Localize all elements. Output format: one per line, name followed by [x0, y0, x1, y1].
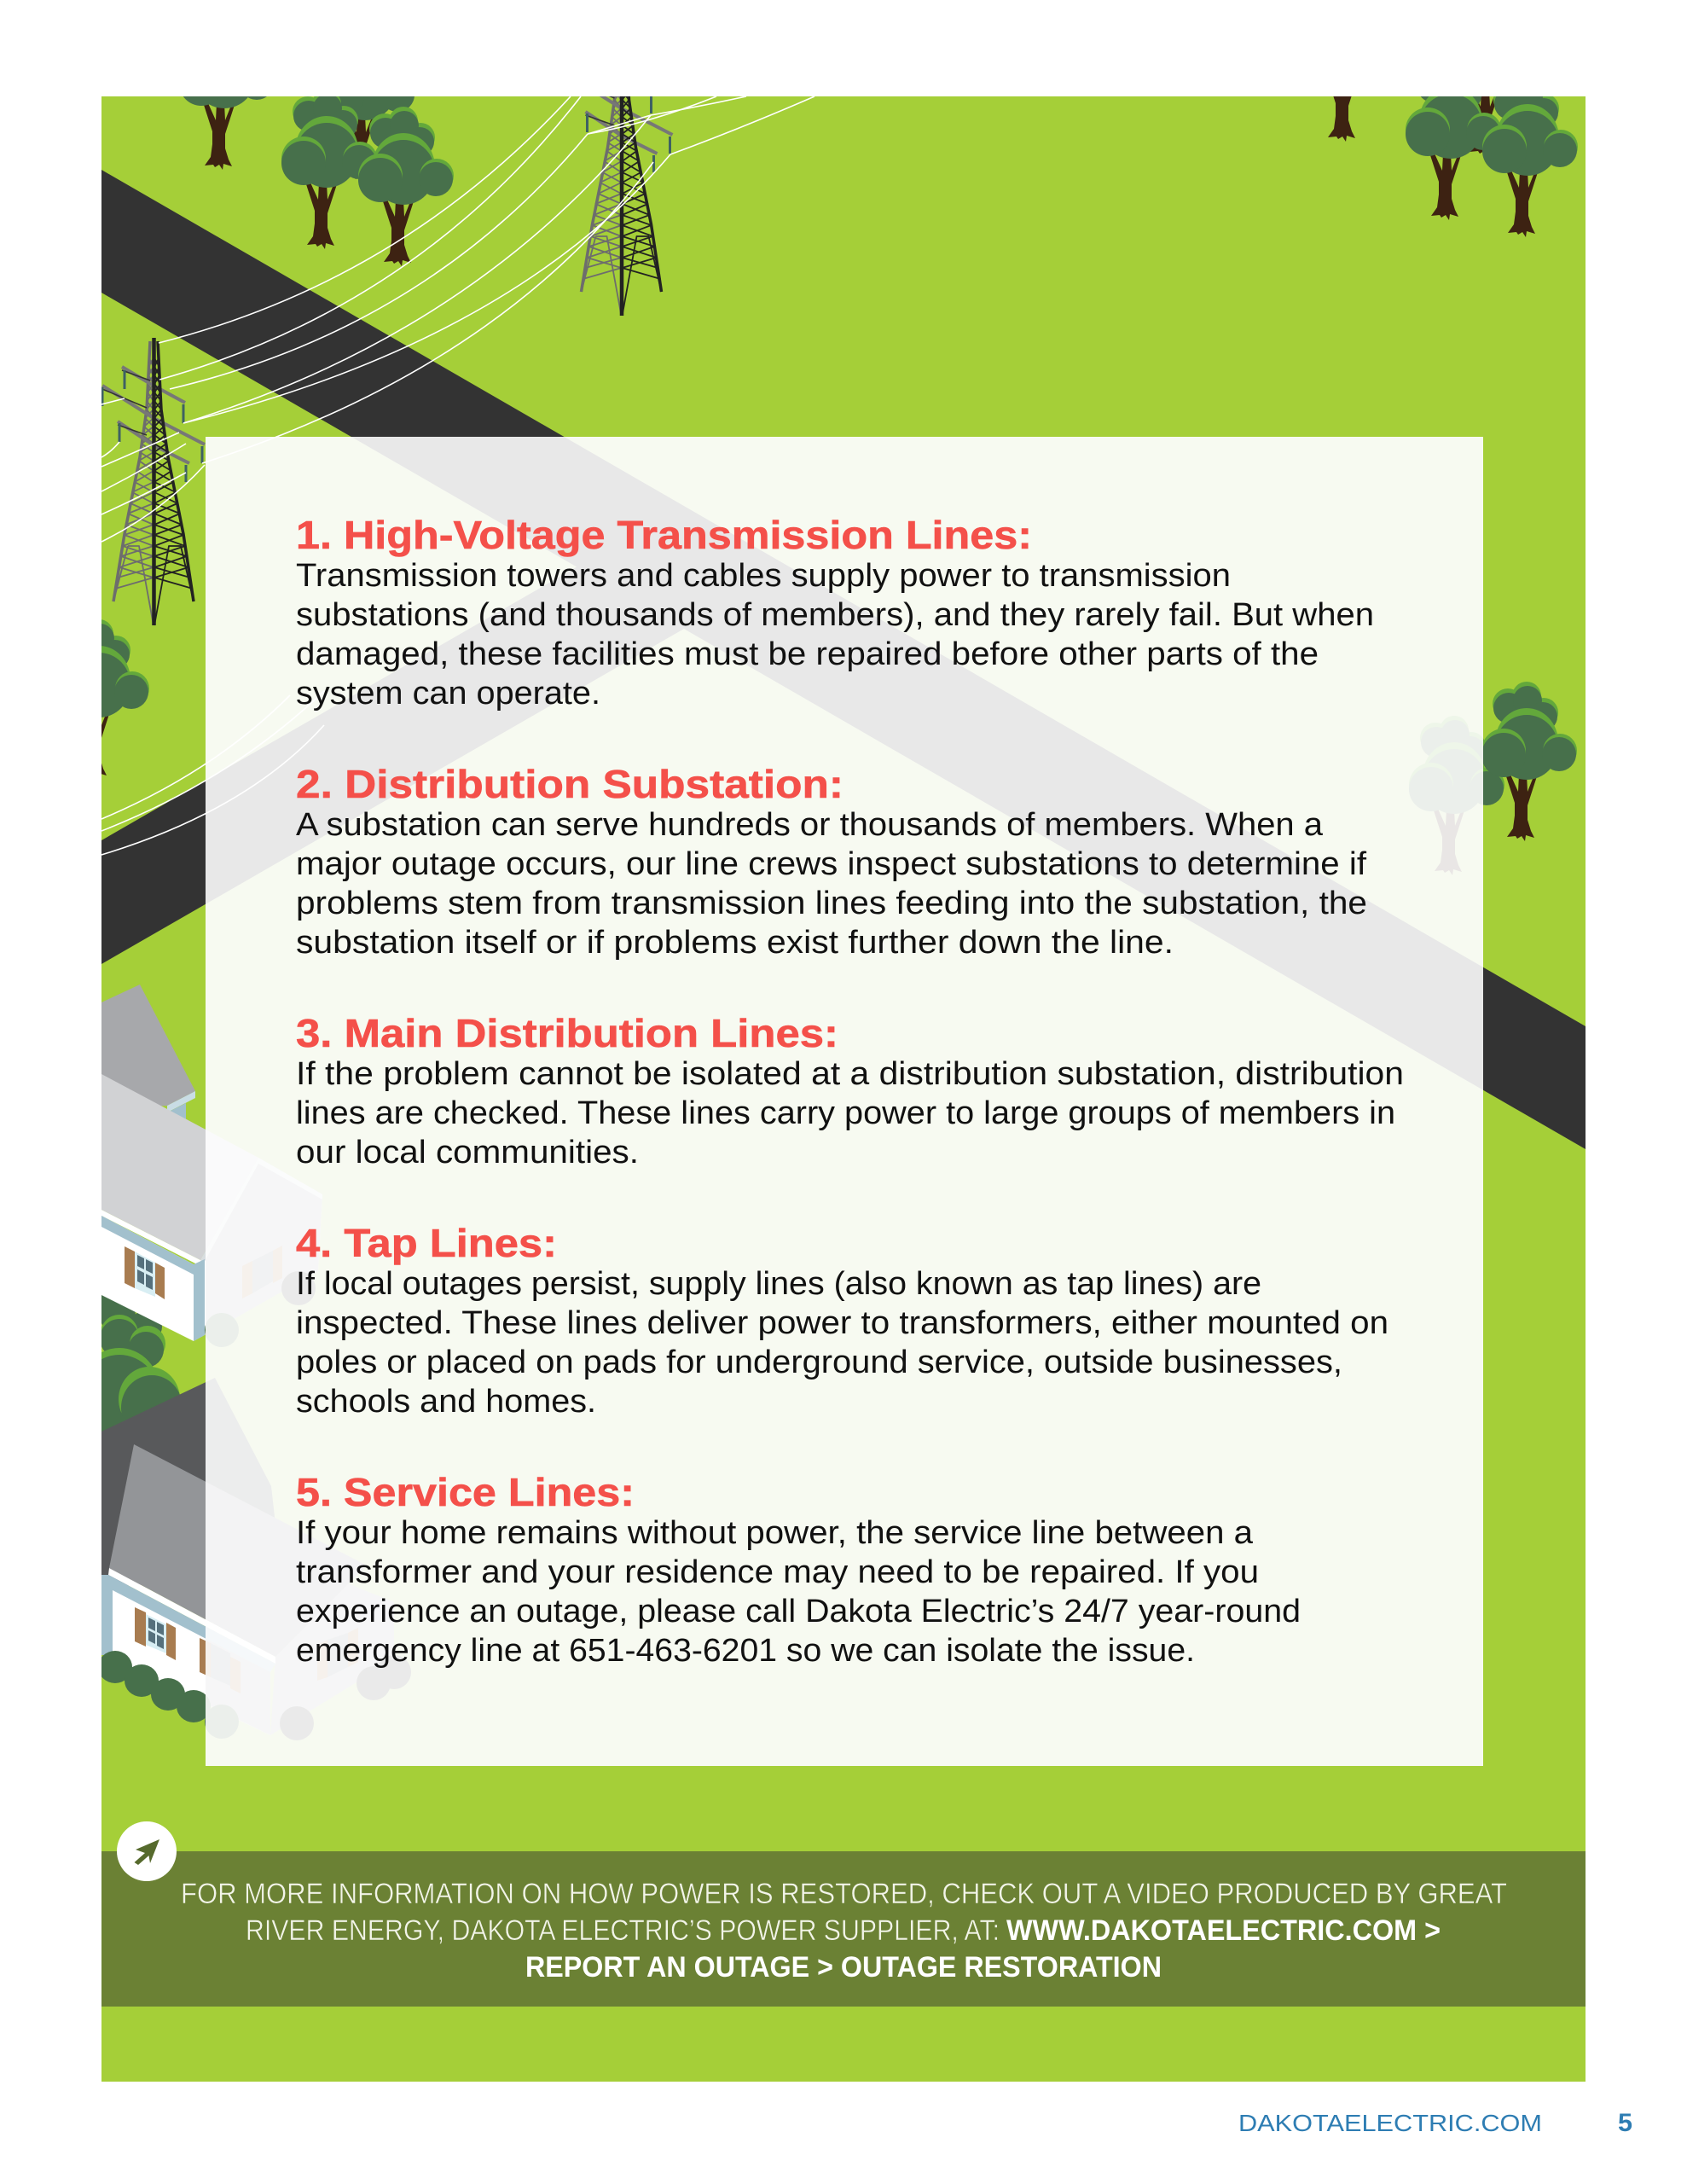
section 3: main distribution lines: our local communities. — [296, 1135, 639, 1170]
road: branch running down to the left — [101, 566, 684, 964]
section 3: main distribution lines: lines are checked. These lines carry power to large groups of members in — [296, 1095, 1395, 1131]
section 1: high-voltage transmission lines: Transmission towers and cables supply power to transmission — [296, 558, 1231, 594]
section 2: distribution substation — [296, 762, 1367, 961]
section 5: service lines: 5. Service Lines: — [296, 1470, 635, 1514]
house: lower — [101, 1378, 358, 1725]
section 4: tap lines: inspected. These lines deliver power to transformers, either mounted on — [296, 1305, 1388, 1341]
ghost gable window — [317, 1628, 358, 1681]
callout band: more information — [101, 1851, 1586, 2007]
panel: text card — [206, 437, 1483, 1766]
footer: website: DAKOTAELECTRIC.COM — [1238, 2110, 1542, 2136]
section 1: high-voltage transmission lines — [296, 513, 1374, 712]
section 5: service lines: experience an outage, please call Dakota Electric’s 24/7 year-round — [296, 1594, 1301, 1629]
section 3: main distribution lines — [296, 1011, 1404, 1170]
callout band: more information: FOR MORE INFORMATION ON HOW POWER IS RESTORED, CHECK OUT A VIDEO PRODUCED BY GREAT — [181, 1878, 1507, 1910]
callout band: more information: WWW.DAKOTAELECTRIC.COM > — [1006, 1914, 1441, 1947]
section 4: tap lines — [296, 1221, 1388, 1420]
transmission tower: left — [102, 338, 205, 625]
callout band: more information: RIVER ENERGY, DAKOTA ELECTRIC’S POWER SUPPLIER, AT: — [246, 1914, 1000, 1947]
shrubs along lower house — [98, 1651, 411, 1740]
section 2: distribution substation: A substation can serve hundreds or thousands of members. When a — [296, 807, 1324, 843]
section 3: main distribution lines: 3. Main Distribution Lines: — [296, 1011, 838, 1055]
section 4: tap lines: schools and homes. — [296, 1384, 596, 1420]
section 5: service lines — [296, 1470, 1301, 1669]
transmission tower: upper — [580, 96, 674, 316]
house: upper, front — [101, 1074, 322, 1341]
road: diagonal running down to the right — [101, 170, 1586, 1149]
power lines — [101, 96, 815, 855]
section 5: service lines: emergency line at 651-463-6201 so we can isolate the issue. — [296, 1633, 1195, 1669]
bushes: left edge cluster — [101, 1295, 180, 1432]
section 5: service lines: If your home remains without power, the service line between a — [296, 1515, 1254, 1551]
house: upper, rear roof — [101, 985, 195, 1126]
section 1: high-voltage transmission lines: damaged, these facilities must be repaired before other parts of the — [296, 636, 1319, 672]
window ghosted under panel — [242, 1246, 282, 1298]
trees: top right group — [1328, 96, 1578, 237]
section 2: distribution substation: major outage occurs, our line crews inspect substations to determine if — [296, 846, 1366, 882]
section 4: tap lines: 4. Tap Lines: — [296, 1221, 557, 1265]
icon: cursor arrow in white circle — [117, 1821, 177, 1881]
section 2: distribution substation: 2. Distribution Substation: — [296, 762, 844, 806]
section 1: high-voltage transmission lines: substations (and thousands of members), and they rarely fail. But when — [296, 597, 1374, 633]
section 4: tap lines: poles or placed on pads for underground service, outside businesses, — [296, 1345, 1342, 1380]
window with shutters — [135, 1607, 176, 1660]
trees: right side pair — [1409, 682, 1577, 875]
section 1: high-voltage transmission lines: 1. High-Voltage Transmission Lines: — [296, 513, 1032, 557]
window with shutters — [125, 1246, 165, 1299]
second window with shutters — [200, 1638, 241, 1693]
trees: left edge — [101, 619, 149, 775]
section 2: distribution substation: substation itself or if problems exist further down the line. — [296, 925, 1174, 961]
section 4: tap lines: If local outages persist, supply lines (also known as tap lines) are — [296, 1266, 1261, 1302]
section 1: high-voltage transmission lines: system can operate. — [296, 676, 600, 712]
trees: top left group — [183, 96, 454, 266]
callout band: more information: REPORT AN OUTAGE > OUTAGE RESTORATION — [525, 1951, 1162, 1984]
section 5: service lines: transformer and your residence may need to be repaired. If you — [296, 1554, 1259, 1590]
section 3: main distribution lines: If the problem cannot be isolated at a distribution substation, distribution — [296, 1056, 1404, 1092]
footer: page number: 5 — [1618, 2109, 1632, 2137]
ghost shrubs beneath panel, upper house — [205, 1271, 316, 1347]
section 2: distribution substation: problems stem from transmission lines feeding into the substation, the — [296, 886, 1367, 921]
